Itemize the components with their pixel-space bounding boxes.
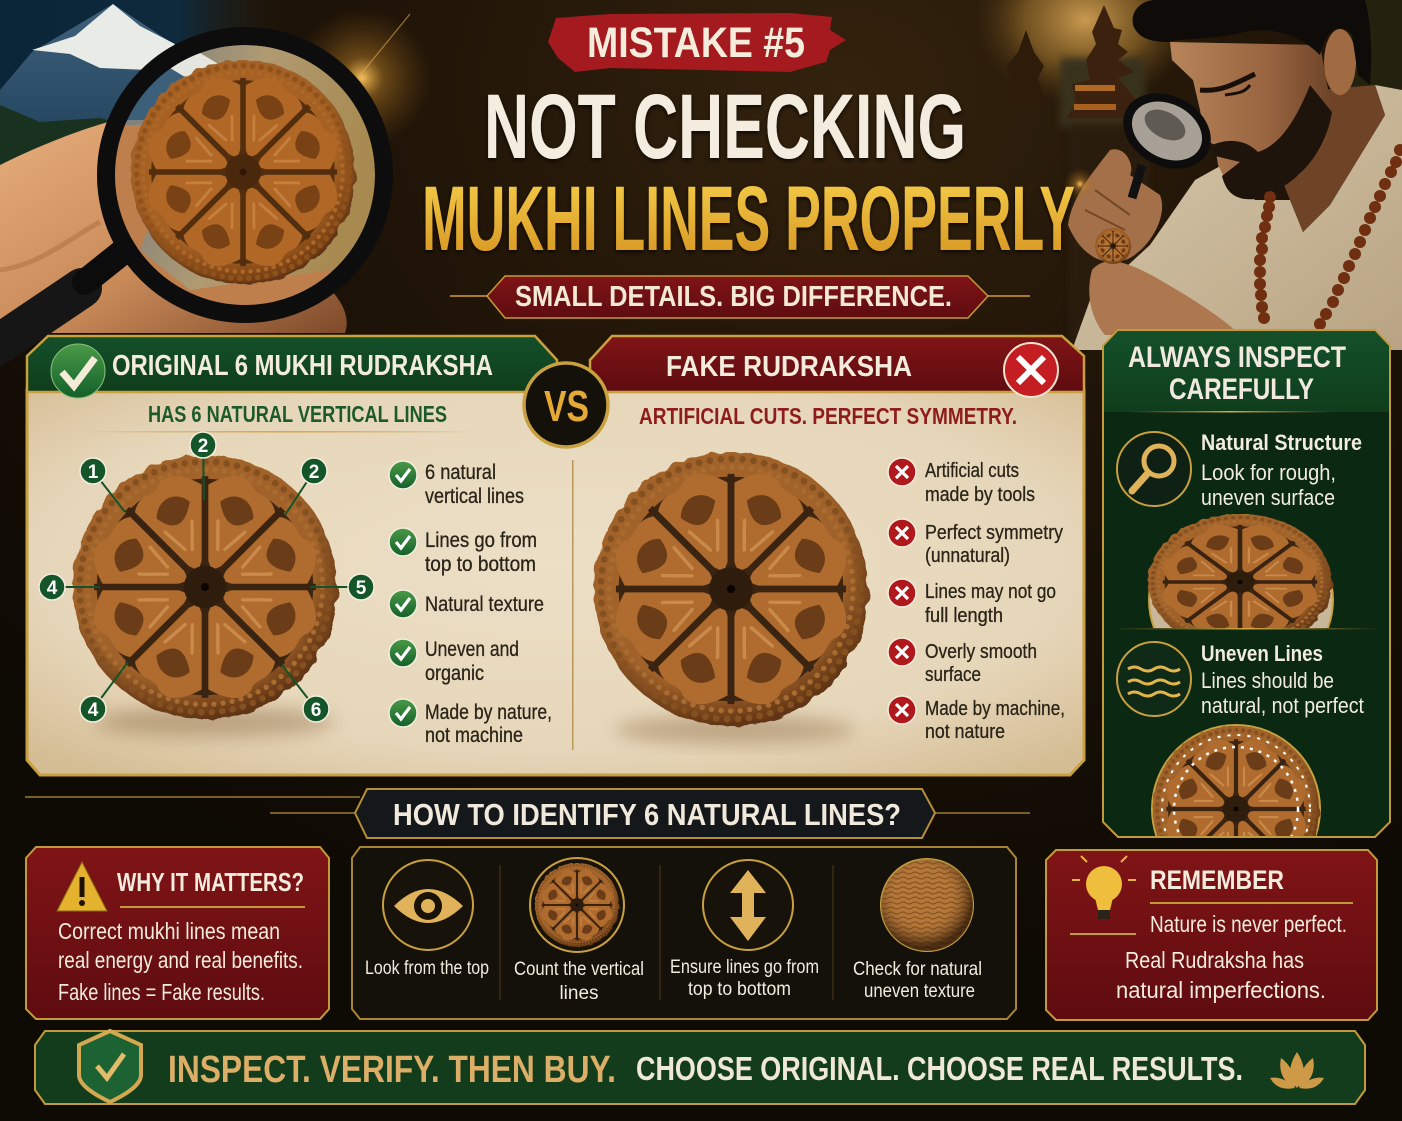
footer text right: CHOOSE ORIGINAL. CHOOSE REAL RESULTS.: [636, 1050, 1243, 1087]
sunset backdrop: [975, 0, 1402, 340]
parchment body: [27, 390, 1084, 775]
original header text: ORIGINAL 6 MUKHI RUDRAKSHA: [112, 350, 493, 382]
neck: [1282, 85, 1385, 232]
original subtitle: HAS 6 NATURAL VERTICAL LINES: [148, 401, 447, 427]
distant temple: [1004, 30, 1048, 108]
original rudraksha with numbered lines: 4: [47, 578, 58, 599]
step: look from the top: Look from the top: [365, 958, 489, 979]
section heading: how to identify: HOW TO IDENTIFY 6 NATURAL LINES?: [393, 797, 901, 832]
bead shadows: [95, 707, 855, 744]
x badge: [1004, 343, 1058, 397]
uneven lines text: Lines should be: [1201, 668, 1334, 693]
icon: magnifying glass: [1117, 432, 1191, 506]
fake header: [590, 336, 1084, 397]
panel: why it matters: [26, 847, 329, 1019]
magnifier rim: [106, 36, 384, 314]
magnifier handle: [0, 250, 125, 350]
face: [1170, 42, 1335, 197]
step: ensure lines go top to bottom: Ensure lines go from: [670, 957, 819, 978]
fake checklist: (unnatural): [925, 545, 1010, 567]
vs badge: VS: [544, 382, 589, 431]
original checklist: top to bottom: [425, 553, 536, 576]
magnified hand area: [115, 125, 330, 305]
footer text left: INSPECT. VERIFY. THEN BUY.: [168, 1049, 616, 1091]
fake checklist: Lines may not go: [925, 581, 1056, 603]
fake checklist: not nature: [925, 721, 1005, 743]
original checklist: Natural texture: [425, 593, 544, 616]
panel: always inspect carefully: [1103, 330, 1390, 893]
step: count the vertical lines: lines: [559, 983, 599, 1004]
fake checklist: full length: [925, 605, 1003, 627]
original checklist: Lines go from: [425, 529, 537, 552]
natural structure text: uneven surface: [1201, 485, 1335, 510]
beard: [1210, 85, 1332, 199]
fake checklist: Overly smooth: [925, 641, 1037, 663]
original checklist: Uneven and: [425, 638, 519, 661]
inspect header: [1104, 331, 1389, 412]
original rudraksha with numbered lines: 5: [356, 578, 367, 599]
subtitle ribbon: [450, 276, 1030, 318]
remember title: REMEMBER: [1150, 865, 1284, 895]
remember text: natural imperfections.: [1116, 977, 1326, 1003]
magnifier lens: [115, 45, 375, 305]
inspect header: CAREFULLY: [1169, 373, 1314, 406]
fake checklist: surface: [925, 664, 981, 686]
panel: remember: [1046, 850, 1377, 1020]
remember text: Real Rudraksha has: [1125, 947, 1304, 973]
inspect header: ALWAYS INSPECT: [1128, 341, 1346, 374]
original rudraksha with numbered lines: 1: [88, 462, 99, 483]
why it matters text: Correct mukhi lines mean: [58, 918, 280, 944]
uneven lines bead image: [1151, 724, 1321, 836]
remember text: Nature is never perfect.: [1150, 911, 1347, 937]
hand magnifier: [1110, 79, 1224, 198]
natural structure text: [1201, 430, 1362, 510]
step: count the vertical lines: [514, 858, 644, 1004]
eyebrow and eye: [1200, 74, 1255, 95]
original rudraksha with numbered lines: 2: [198, 436, 208, 457]
sparkle: [1064, 168, 1096, 200]
natural structure text: Look for rough,: [1201, 460, 1336, 485]
check badge: [51, 344, 105, 398]
natural structure bead image: [1148, 514, 1334, 628]
original rudraksha with numbered lines: 6: [311, 700, 321, 721]
original rudraksha with numbered lines: [39, 432, 374, 722]
original checklist: vertical lines: [425, 485, 524, 508]
icon: lotus: [1270, 1052, 1324, 1089]
small rudraksha in hand: [1095, 228, 1131, 264]
step: check natural texture: [853, 859, 982, 1002]
fake rudraksha: [594, 452, 868, 726]
step: look from the top: [365, 860, 489, 979]
hair: [1133, 0, 1371, 85]
original rudraksha with numbered lines: 4: [88, 700, 99, 721]
illustration: mountain scene: [0, 0, 290, 165]
fake header text: FAKE RUDRAKSHA: [666, 351, 912, 383]
why it matters text: real energy and real benefits.: [58, 947, 303, 973]
fake checklist: [888, 458, 1065, 743]
original checklist: organic: [425, 662, 484, 685]
title badge: [548, 13, 846, 72]
step: check natural texture: Check for natural: [853, 959, 982, 980]
rudraksha necklace: [1254, 144, 1402, 330]
ear: [1324, 29, 1356, 95]
why it matters text: Fake lines = Fake results.: [58, 979, 265, 1005]
original header: [27, 336, 557, 398]
magnified rudraksha: [131, 60, 355, 284]
illustration: magnifying glass with magnified bead: [0, 36, 384, 350]
shirt: [1072, 85, 1402, 350]
magnified mountain: [128, 53, 218, 120]
fake checklist: Perfect symmetry: [925, 522, 1063, 544]
panel: comparison: [27, 336, 1084, 775]
why it matters text: [58, 918, 303, 1005]
original checklist: 6 natural: [425, 461, 496, 484]
title badge: MISTAKE #5: [587, 19, 805, 67]
vs badge: [524, 363, 608, 447]
original checklist: Made by nature,: [425, 701, 552, 724]
subtitle ribbon: SMALL DETAILS. BIG DIFFERENCE.: [515, 281, 952, 313]
section heading: how to identify: [25, 789, 1030, 838]
heading line 1: NOT CHECKING: [484, 76, 966, 178]
step: count the vertical lines: Count the vertical: [514, 959, 644, 980]
icon: warning triangle: [57, 862, 107, 911]
uneven lines text: [1201, 641, 1364, 718]
fake checklist: Artificial cuts: [925, 460, 1019, 482]
why it matters title: WHY IT MATTERS?: [117, 867, 304, 897]
illustration: temple scene and man inspecting: [975, 0, 1402, 350]
fake checklist: made by tools: [925, 484, 1035, 506]
icon: wavy lines: [1117, 642, 1191, 716]
hands: [1068, 149, 1240, 335]
step: ensure lines go top to bottom: top to bottom: [688, 979, 791, 1000]
remember text: [1116, 911, 1347, 1003]
fake subtitle: ARTIFICIAL CUTS. PERFECT SYMMETRY.: [639, 403, 1017, 429]
panel: identification steps: [352, 847, 1016, 1019]
step: ensure lines go top to bottom: [670, 860, 819, 1000]
uneven lines text: Uneven Lines: [1201, 641, 1323, 666]
fake checklist: Made by machine,: [925, 698, 1065, 720]
illustration: golden light burst: [292, 8, 432, 148]
footer banner: [35, 1031, 1365, 1104]
original checklist: not machine: [425, 724, 523, 747]
icon: shield: [79, 1031, 141, 1102]
step: check natural texture: uneven texture: [864, 981, 975, 1002]
original rudraksha with numbered lines: 2: [309, 462, 319, 483]
temple: [1066, 5, 1136, 118]
uneven lines text: natural, not perfect: [1201, 693, 1364, 718]
icon: light bulb: [1072, 856, 1136, 919]
illustration: hand holding bead: [0, 122, 347, 333]
natural structure text: Natural Structure: [1201, 430, 1362, 455]
original checklist: [389, 461, 552, 747]
